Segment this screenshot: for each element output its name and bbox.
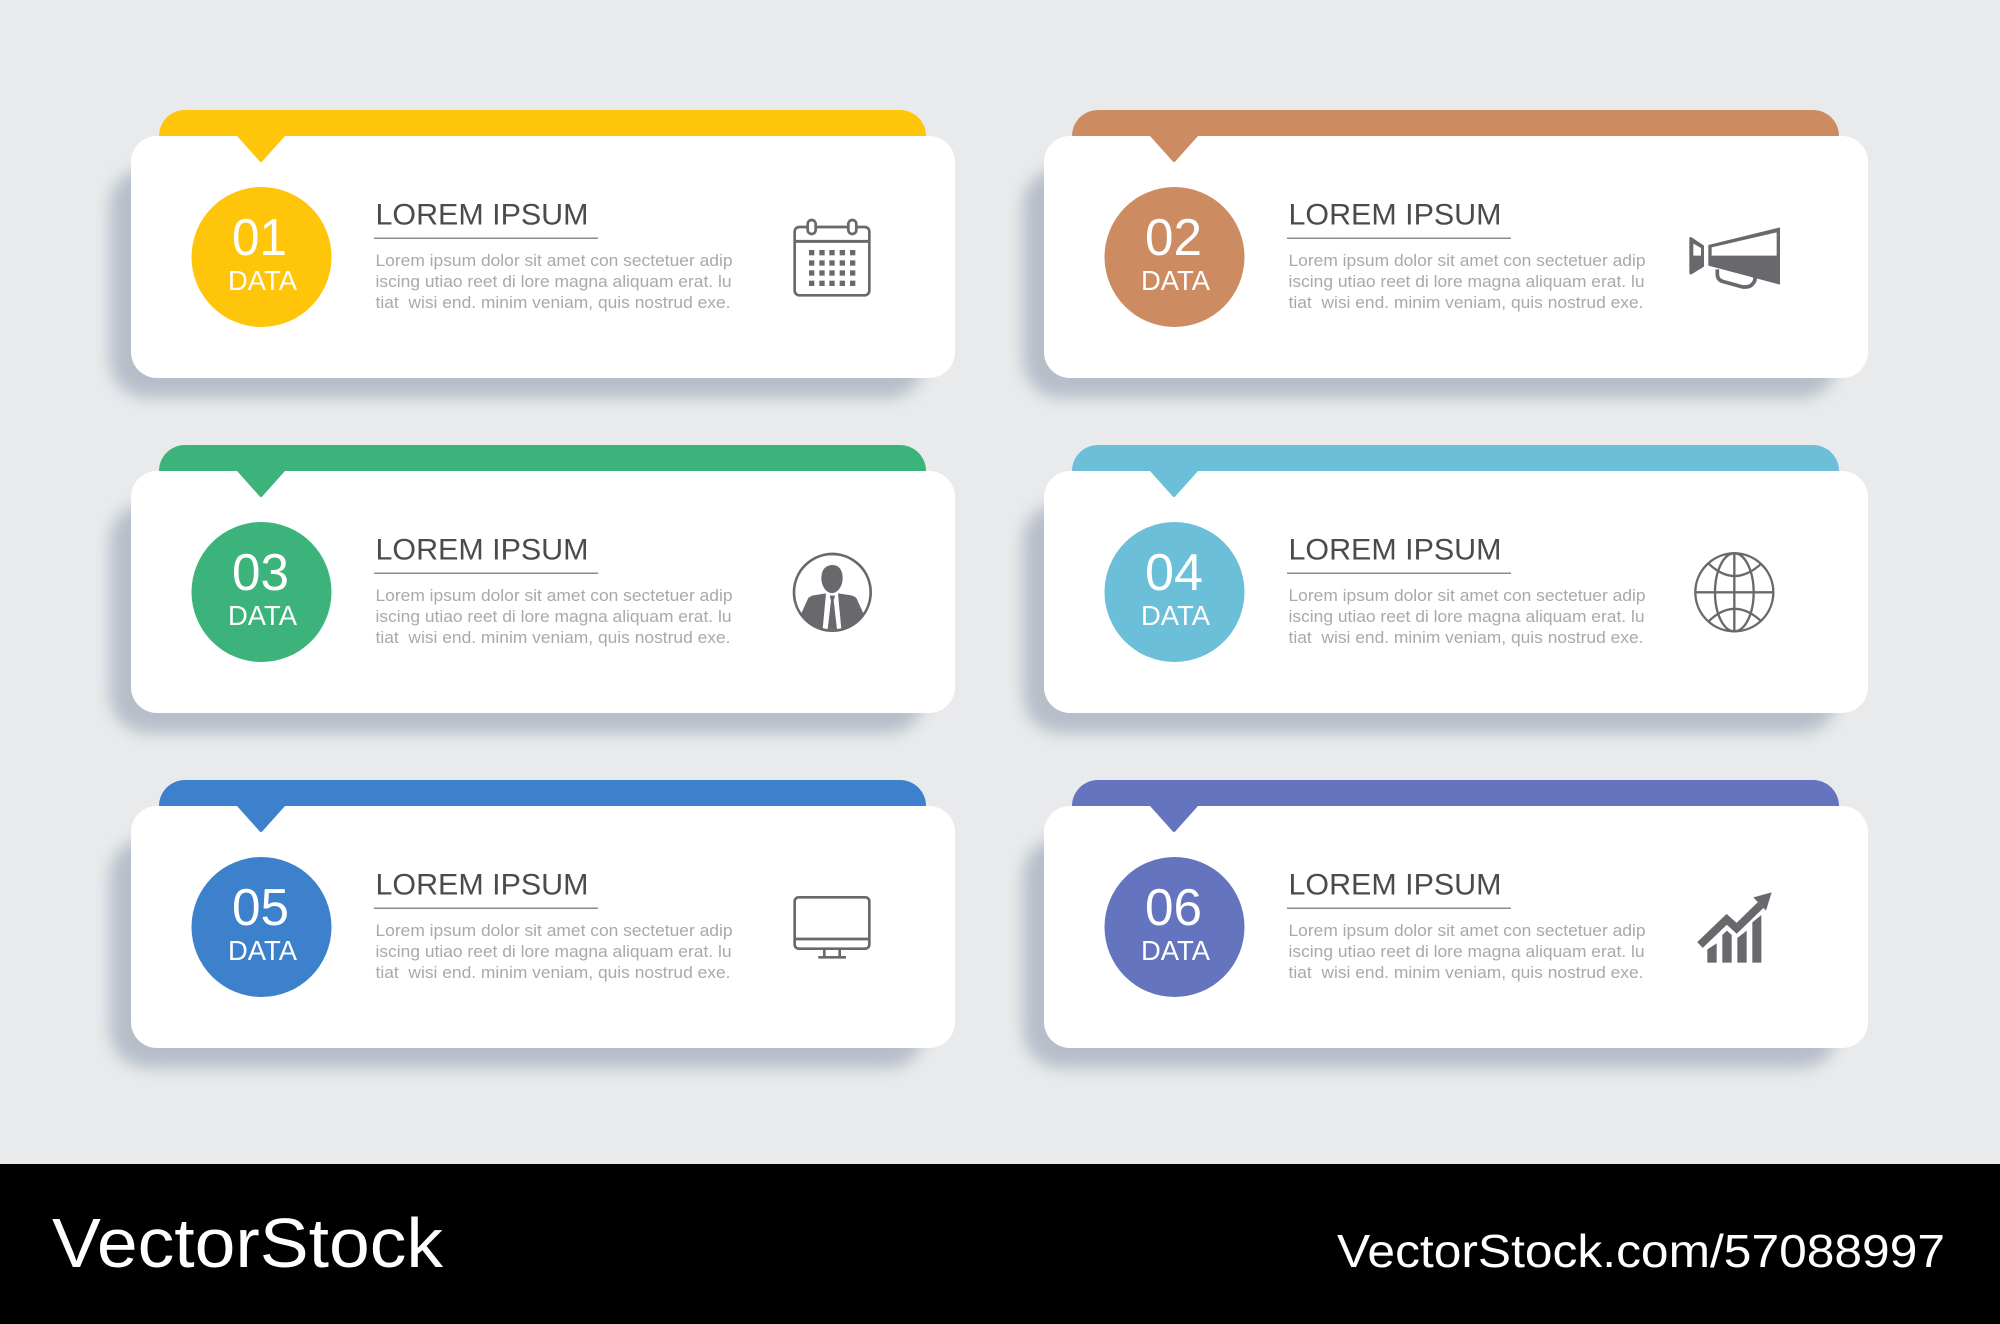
body text 01: tiat wisi end. minim veniam, quis nostrud exe. [376,293,730,312]
number badge 01: DATA [228,265,297,296]
number badge 04 [1104,522,1244,662]
body text 06: tiat wisi end. minim veniam, quis nostrud exe. [1288,963,1644,982]
number badge 01 [192,187,332,327]
body text 06 [1288,921,1646,982]
watermark logo: VectorStock [52,1204,444,1282]
number badge 03: DATA [228,600,297,631]
number badge 05: DATA [228,935,297,966]
number badge 02 [1104,187,1244,327]
number badge 04: 04 [1145,544,1203,602]
body text 06: Lorem ipsum dolor sit amet con sectetuer adip [1288,921,1646,940]
panel: card 02 [1023,110,1868,398]
body text 01: Lorem ipsum dolor sit amet con sectetuer adip [376,251,732,270]
body text 04 [1288,586,1646,647]
footer band [0,1164,2000,1324]
body text 02 [1288,251,1646,312]
number badge 06 [1104,857,1244,997]
icon: megaphone [1689,227,1780,287]
body text 05: Lorem ipsum dolor sit amet con sectetuer adip [376,921,732,940]
heading 06: LOREM IPSUM [1288,868,1502,902]
icon: monitor [795,897,869,957]
body text 04: tiat wisi end. minim veniam, quis nostrud exe. [1288,628,1644,647]
number badge 01: 01 [232,209,287,267]
body text 05: tiat wisi end. minim veniam, quis nostrud exe. [376,963,730,982]
number badge 02: DATA [1141,265,1210,296]
heading 05: LOREM IPSUM [376,868,588,902]
panel: card 03 [110,445,955,733]
number badge 06: 06 [1145,879,1202,937]
body text 03: iscing utiao reet di lore magna aliquam erat. lu [376,607,732,626]
watermark url: VectorStock.com/57088997 [1337,1225,1945,1277]
heading 02: LOREM IPSUM [1288,198,1502,232]
body text 04: Lorem ipsum dolor sit amet con sectetuer adip [1288,586,1646,605]
body text 03: tiat wisi end. minim veniam, quis nostrud exe. [376,628,730,647]
number badge 03: 03 [232,544,289,602]
panel: card 06 [1023,780,1868,1068]
number badge 04: DATA [1141,600,1210,631]
number badge 05: 05 [232,879,289,937]
icon: calendar [795,220,869,295]
body text 01 [376,251,732,312]
number badge 02: 02 [1145,209,1202,267]
panel: card 01 [110,110,955,398]
body text 01: iscing utiao reet di lore magna aliquam erat. lu [376,272,732,291]
body text 06: iscing utiao reet di lore magna aliquam erat. lu [1288,942,1644,961]
number badge 06: DATA [1141,935,1210,966]
heading 04: LOREM IPSUM [1288,534,1502,566]
panel: card 05 [110,780,955,1068]
icon: businessman [794,554,871,631]
body text 02: Lorem ipsum dolor sit amet con sectetuer adip [1288,251,1646,270]
heading 03: LOREM IPSUM [376,534,588,566]
body text 05: iscing utiao reet di lore magna aliquam erat. lu [376,942,732,961]
body text 03 [376,586,732,647]
number badge 03 [192,522,332,662]
icon: growth chart [1700,892,1772,963]
body text 04: iscing utiao reet di lore magna aliquam erat. lu [1288,607,1644,626]
number badge 05 [192,857,332,997]
panel: card 04 [1023,445,1868,733]
body text 02: iscing utiao reet di lore magna aliquam erat. lu [1288,272,1644,291]
icon: globe [1695,553,1773,631]
body text 02: tiat wisi end. minim veniam, quis nostrud exe. [1288,293,1644,312]
body text 05 [376,921,732,982]
heading 01: LOREM IPSUM [376,198,588,232]
body text 03: Lorem ipsum dolor sit amet con sectetuer adip [376,586,732,605]
